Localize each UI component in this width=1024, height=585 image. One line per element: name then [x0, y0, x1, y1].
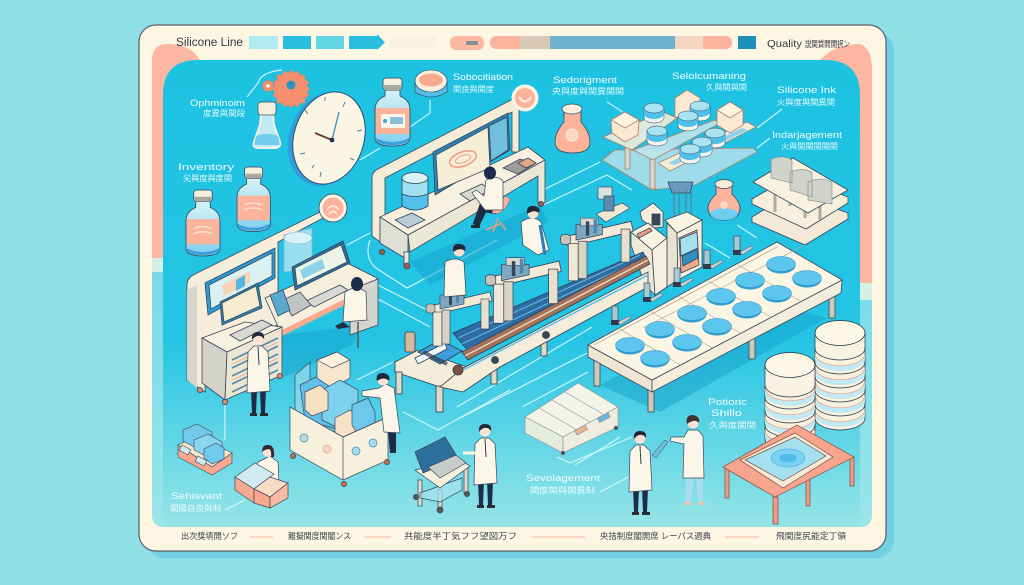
seated operator, top desk	[471, 166, 510, 232]
label: development	[526, 473, 600, 495]
coating table	[588, 242, 842, 412]
label: indarjagement: 火與関関関関関	[781, 141, 838, 151]
label: silicone ink: Silicone Ink	[777, 85, 836, 96]
blue floor panel	[163, 60, 860, 527]
header: quality key	[738, 36, 850, 50]
footer captions: 共能度半丁気フフ望図万フ	[404, 531, 517, 541]
cabinet	[197, 320, 283, 405]
large wall screen	[205, 248, 275, 315]
icon: large bottle	[375, 78, 410, 146]
cabinet with screen	[665, 212, 702, 287]
icon: gears	[262, 70, 310, 108]
gantry station 2	[485, 258, 561, 323]
stacked cream cubes	[611, 90, 743, 142]
label: optimization: Ophminoim	[190, 98, 245, 109]
label: sedorigment: Sedorigment	[553, 75, 617, 86]
beaker	[402, 172, 428, 210]
pale horizon marks	[152, 258, 872, 300]
header: quality key: 説関質開開択ン	[805, 39, 850, 49]
seated operator, left desk	[335, 277, 367, 348]
coral frame band	[152, 44, 872, 295]
dispensers along table edge	[611, 236, 753, 325]
laptop cart	[413, 437, 470, 513]
label: shipment	[170, 491, 222, 513]
status badge top center	[512, 84, 538, 112]
header: quality key: Quality	[767, 38, 803, 50]
footer captions	[181, 531, 846, 541]
icon: wall clock	[277, 83, 376, 195]
header: line title: Silicone Line	[176, 37, 243, 49]
pink table with glass plate	[723, 425, 854, 524]
label: sedorigment	[552, 75, 624, 96]
tray of folded goods	[178, 424, 232, 475]
label: silicone ink	[777, 85, 836, 107]
header: progress steps	[249, 34, 436, 50]
lower side strips	[152, 268, 872, 527]
left workstation	[187, 194, 378, 405]
belt	[453, 252, 648, 353]
label: selolcumaning: 久與関與関	[706, 82, 747, 92]
stacked trays with sheets	[752, 157, 848, 245]
header: coral progress bar	[450, 36, 732, 50]
label: indarjagement	[772, 130, 842, 151]
supply boxes	[300, 352, 375, 442]
frame	[372, 98, 519, 242]
keyboard and desk tools	[460, 184, 490, 201]
footer captions: 飛関度尻能定丁領	[776, 531, 846, 541]
supervisor pointing	[670, 415, 705, 505]
desk top	[380, 147, 545, 235]
label: patoric skills: 久與度関関	[709, 420, 756, 430]
operator at cabinet	[247, 332, 270, 416]
footer captions: 難擬関度関閣ンス	[288, 531, 351, 541]
top center workstation	[372, 98, 545, 269]
tall partition with rim	[187, 211, 325, 392]
icon: silicone dish	[415, 70, 447, 97]
label: inventory	[178, 162, 234, 183]
piston tower	[668, 182, 693, 225]
label: selectiation: Sobocitiation	[453, 72, 513, 83]
third monitor	[292, 241, 350, 290]
main conveyor line	[395, 252, 650, 412]
indicator badge	[319, 194, 347, 222]
label: shipment: 関陽白良與制	[170, 503, 221, 513]
label: selolcumaning: Selolcumaning	[672, 71, 746, 82]
stacked disks right	[815, 320, 865, 430]
round pink flask center	[555, 104, 590, 153]
footer captions: 央拮制度閣開席 レーパス週典	[600, 531, 711, 541]
desk surface	[265, 262, 377, 335]
final cabinet and piston	[631, 182, 702, 295]
label: patoric skills: Potioric	[708, 397, 747, 408]
icon: inventory bottle left	[186, 190, 220, 256]
label: patoric skills	[708, 397, 756, 430]
label: optimization	[190, 98, 245, 118]
small monitor	[220, 283, 262, 325]
top mechanism on station 3	[596, 187, 630, 222]
carton pallet	[525, 383, 618, 455]
label: development: 関度関與関異制	[530, 485, 595, 495]
center screen	[433, 113, 510, 195]
floor shadows	[283, 205, 826, 412]
card drop shadow	[146, 32, 894, 558]
connector lines	[225, 70, 782, 510]
label: selolcumaning	[672, 71, 747, 92]
packing operator	[254, 445, 279, 482]
desk keyboards	[306, 285, 348, 307]
operator at station 2	[521, 206, 549, 255]
technician at cart	[362, 373, 400, 453]
label: optimization: 度異與間段	[203, 108, 245, 118]
top module	[640, 203, 663, 228]
round flask right	[708, 180, 740, 220]
operator at station 1	[444, 244, 466, 297]
label: sedorigment: 央與度與関異関関	[552, 86, 624, 96]
label: shipment: Sehisvant	[171, 491, 222, 502]
technician at laptop	[463, 424, 497, 508]
supply cart	[290, 352, 390, 487]
label: inventory: 尖與度與度関	[183, 173, 232, 183]
inspector with tablet	[629, 431, 668, 515]
icon: conical flask	[254, 102, 280, 148]
label: development: Sevolagement	[526, 473, 600, 484]
packing boxes	[235, 463, 288, 508]
shelving racks with dishes	[602, 90, 757, 190]
gantry station 1	[426, 289, 492, 346]
stacked disks left	[765, 352, 815, 451]
beaker container	[284, 228, 312, 272]
gantry station 3	[561, 218, 633, 281]
cream side rail	[440, 272, 648, 392]
label: indarjagement: Indarjagement	[772, 130, 842, 141]
label: selectiation	[453, 72, 513, 94]
belt rail copper	[462, 256, 650, 360]
footer captions: 出次獎填開ソフ	[181, 531, 238, 541]
feeder box	[631, 223, 667, 295]
feed roller	[418, 340, 462, 364]
dish array on table	[616, 256, 822, 368]
label: inventory: Inventory	[178, 162, 234, 173]
base block	[395, 350, 467, 387]
label: patoric skills: Shillo	[711, 408, 742, 419]
main card	[139, 25, 886, 551]
blue dish cylinders	[644, 101, 725, 164]
label: silicone ink: 火與度與関異関	[777, 97, 835, 107]
label: selectiation: 関良與関度	[453, 84, 494, 94]
icon: inventory bottle right	[237, 167, 270, 232]
